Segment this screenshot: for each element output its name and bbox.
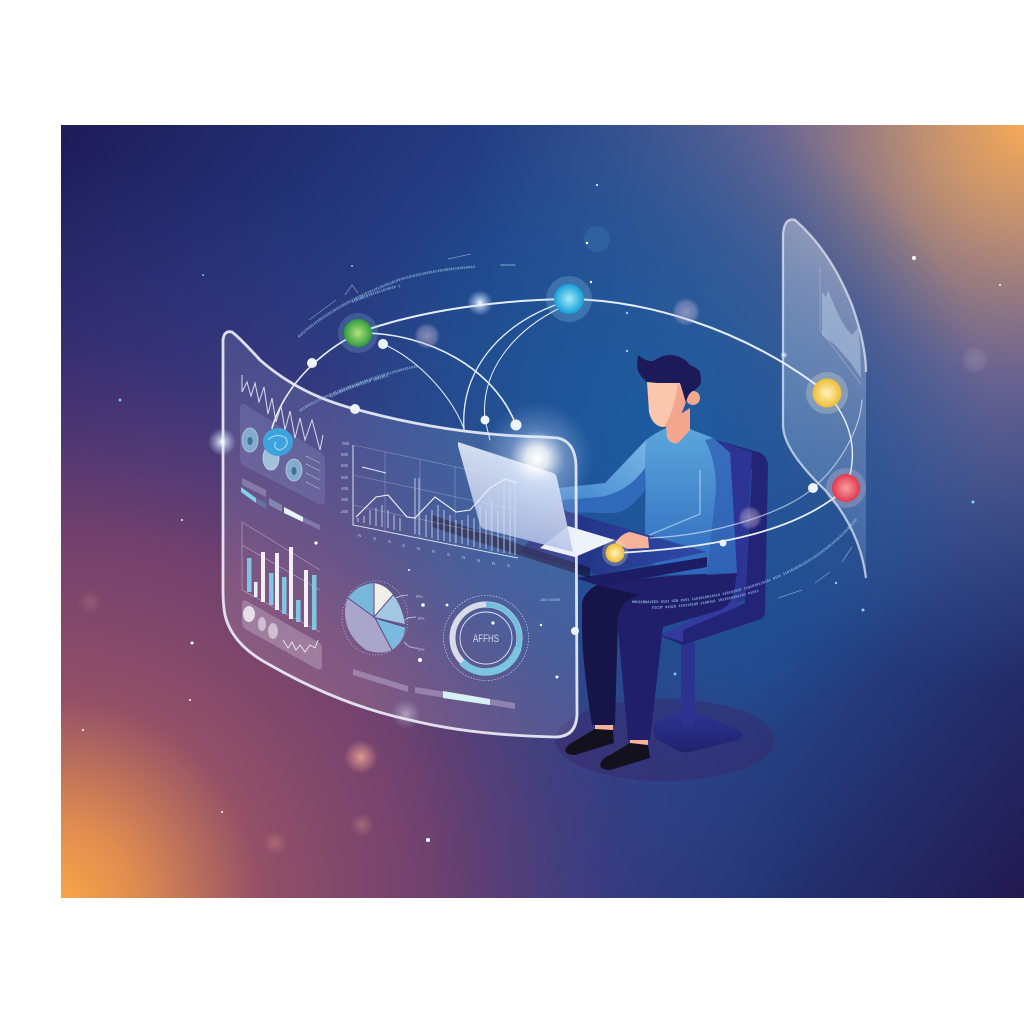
node: yellow small [602,540,628,566]
far leg [582,578,640,725]
near arm highlight [647,470,700,536]
chair [653,440,768,752]
holographic data streams: 010110101101001010110101001011101001010110110101101001011010101101010110100101101010010 [298,266,474,338]
node: green [338,313,378,353]
floor shadow [555,699,775,781]
donut gauge [444,596,528,680]
main line chart: S [373,536,376,541]
main line chart: 50k [341,475,349,480]
main line chart: N [462,555,465,560]
small connection dots [307,339,818,635]
left curved glass panel [223,332,577,737]
main line chart: R [432,549,436,554]
reaching arm [558,440,646,513]
pie chart [342,581,425,655]
connection arcs [272,299,862,553]
hand [615,532,649,549]
top left card with gauges [240,375,325,504]
bar chart [242,522,320,632]
pie chart: 0% [416,594,423,599]
gauge circles [242,428,302,481]
holographic data streams: 01101001011010010110 1001011 [329,374,388,398]
holographic data streams [298,254,857,609]
holographic data streams: 1010010111010010101101010011010100101101001011010010110100101101001 [299,365,418,412]
donut label: AFFHS [473,633,499,645]
main line chart: 60k [341,463,349,468]
holographic data streams: MOVIENDAIEEE 0101 UIN 0101 1101010011010 110101010 1101010110101 0101 110101010110101101010101011010101101010110101 [632,518,857,604]
main line chart [341,441,518,568]
main line chart: N [477,558,480,563]
main line chart: N [417,546,420,551]
face shade [664,382,686,427]
card labels [306,456,320,489]
main line chart: 40k [341,486,349,491]
panel sparkle dots [314,541,542,662]
laptop [458,442,615,557]
ankles [595,722,648,746]
main line chart: 20k [341,509,349,514]
face [647,382,686,427]
main line chart: N [358,533,361,538]
laptop glow [481,402,593,514]
ear [686,391,700,405]
shirt torso [645,428,737,575]
main line chart: S [402,543,405,548]
right curved glass panel [783,220,866,578]
pie chart: 0% [418,647,425,652]
main line chart: S [447,552,450,557]
small status bars [241,478,320,530]
shoes [565,729,650,770]
hair [637,355,701,403]
main line chart: S [388,539,391,544]
right panel chart [822,290,861,378]
lower progress bars [353,669,515,709]
person [558,355,737,770]
main line chart: 80k [341,452,349,457]
blue blob [263,428,293,456]
main line chart: N [492,561,495,566]
glow dots [208,290,788,729]
near leg [597,573,737,740]
zigzag line chart [242,375,323,450]
pie chart: 8% [418,616,425,621]
holographic data streams: 180/16400 [540,598,560,603]
main line chart: S [507,563,510,568]
main line chart: 30k [341,497,349,502]
node: red [826,468,866,508]
node: yellow right [806,372,848,414]
background bokeh and stars [78,184,1001,855]
neck [666,408,690,443]
holographic data streams: 1010101 [500,264,516,268]
node: blue [546,276,592,322]
desk [432,508,707,586]
holographic data streams: 110100101011011010010 1101001 [352,284,400,303]
bottom left map card [242,600,322,670]
reaching arm shade [562,468,645,513]
main line chart: 00k [342,441,350,446]
holographic data streams: FICUT 01010 110110100 1100101 1011010101101 01011 [652,590,759,609]
shirt side shade [705,438,737,575]
